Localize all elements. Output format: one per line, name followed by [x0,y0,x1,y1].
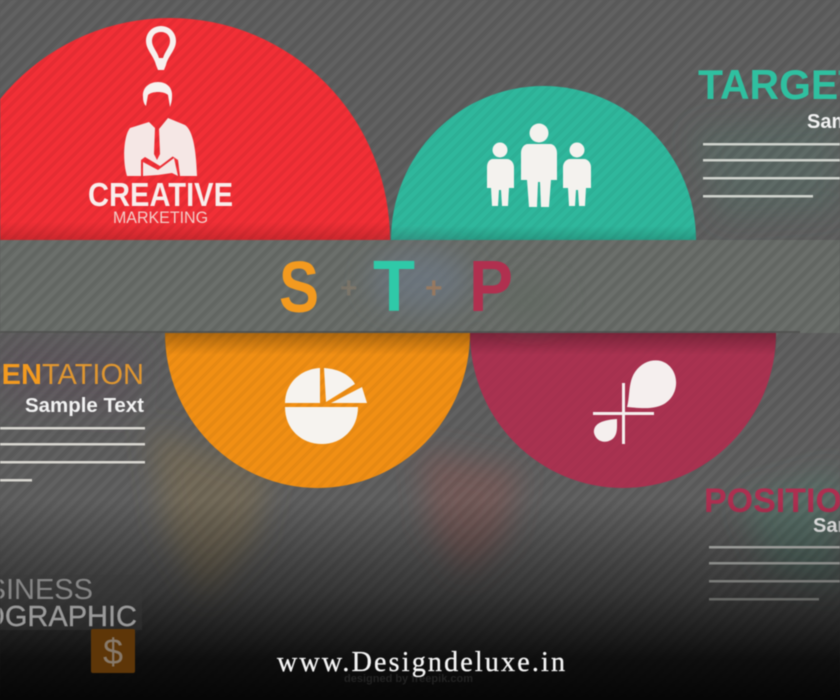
icon: family of three [487,124,591,207]
bottom dark fade [0,500,840,700]
icon: businessman with crossed arms [124,82,197,176]
text block: positioning [704,482,840,600]
icon: dollar box: $ [103,631,123,672]
panel: red semicircle, creative marketing [0,18,390,240]
text lines [709,546,840,600]
icon: drops and cross [593,360,676,444]
label: marketing: MARKETING [113,208,208,227]
central band [0,240,840,333]
icon: light bulb [146,26,176,70]
letter P: P [469,247,513,327]
panel: orange semicircle, pie chart [165,333,470,488]
panel: crimson semicircle, positioning icon [470,333,776,488]
faint plus sign: + [425,272,443,305]
label: creative: CREATIVE [88,176,233,213]
letter T: T [373,247,415,327]
faded world map [0,110,840,600]
text lines [703,143,840,198]
faint plus sign: + [340,272,358,305]
map tint in band [370,250,560,320]
text block: segmentation [0,359,145,482]
letter S: S [279,248,319,328]
subheading: Sample Text [25,395,144,417]
icon: dollar box [91,629,135,673]
text block: business infographic [0,574,142,673]
footer website: www.Designdeluxe.in [277,647,565,678]
icon: pie chart [285,368,367,444]
text block: targeting [698,61,840,198]
credit: designed by freepik: designed by freepik.com [344,673,473,685]
text lines [0,427,145,482]
panel: teal semicircle, family [391,86,696,240]
